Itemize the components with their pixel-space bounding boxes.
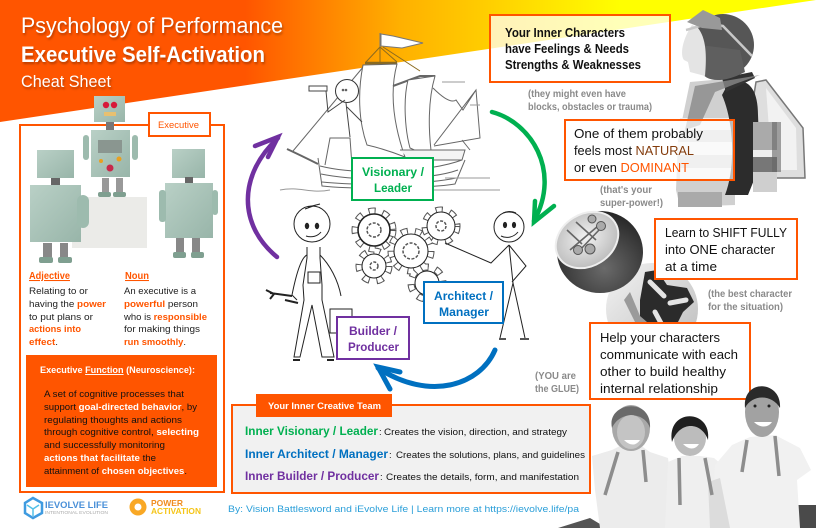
label: builder producer xyxy=(337,317,409,359)
text: adjective definition: actions into xyxy=(29,324,81,335)
text: noun definition: powerful person xyxy=(124,299,198,310)
label: visionary leader xyxy=(352,158,433,200)
callout: executive function: regulating thoughts and actions xyxy=(44,415,182,426)
callout: executive function: support goal-directed behavior, by xyxy=(44,402,197,413)
text: noun definition xyxy=(123,270,207,348)
text: noun definition: An executive is a xyxy=(124,286,197,297)
callout: shift fully xyxy=(655,219,797,279)
callout: help characters communicate: communicate with each xyxy=(600,347,738,362)
tab heading xyxy=(256,394,392,417)
callout: inner characters: Strengths & Weaknesses xyxy=(505,58,641,72)
callout: inner characters xyxy=(490,15,670,82)
note: super-power: (that's your xyxy=(600,185,652,196)
team list: Creates the vision, direction, and strategy xyxy=(384,427,567,438)
label: visionary leader: Leader xyxy=(374,183,413,195)
note: blocks xyxy=(528,89,652,113)
note: best character: (the best character xyxy=(708,289,792,300)
label: builder producer: Producer xyxy=(348,342,400,354)
illustration: robots xyxy=(30,96,218,263)
team list xyxy=(245,426,585,483)
text: noun definition: run smoothly. xyxy=(124,337,186,348)
team list: : xyxy=(379,427,382,438)
logo: iEvolve Life: IEVOLVE LIFE xyxy=(45,500,108,510)
team list: Creates the details, form, and manifestation xyxy=(386,472,579,483)
footer credit: By: Vision Battlesword and iEvolve Life | Learn more at https://ievolve.life/pa xyxy=(228,504,580,515)
callout: executive function xyxy=(26,355,217,487)
illustration: ship with lookout xyxy=(280,33,500,191)
callout: help characters communicate xyxy=(590,323,750,399)
label: visionary leader: Visionary / xyxy=(362,167,425,179)
arrow: green xyxy=(492,112,554,222)
illustration: architect figure xyxy=(445,212,529,339)
photo: boy with jetpack xyxy=(676,10,805,207)
label: architect manager: Architect / xyxy=(434,291,494,303)
tab heading: Your Inner Creative Team xyxy=(268,401,381,412)
note: you are the glue: the GLUE) xyxy=(535,384,579,395)
callout: help characters communicate: internal relationship xyxy=(600,381,718,396)
callout: shift fully: into ONE character xyxy=(665,242,776,257)
callout: inner characters: Your Inner Characters xyxy=(505,26,625,40)
callout: help characters communicate: other to build healthy xyxy=(600,364,727,379)
panel: inner creative team xyxy=(232,394,590,493)
note: blocks: blocks, obstacles or trauma) xyxy=(528,102,652,113)
note: super-power xyxy=(600,185,663,209)
text: adjective definition xyxy=(29,270,106,348)
banner background xyxy=(0,0,816,122)
team list: Inner Builder / Producer xyxy=(245,471,380,483)
label: builder producer: Builder / xyxy=(349,326,398,338)
callout: natural or dominant: feels most NATURAL xyxy=(574,143,694,158)
note: super-power: super-power!) xyxy=(600,198,663,209)
team list: Creates the solutions, plans, and guidelines xyxy=(396,450,585,461)
callout: natural or dominant: One of them probably xyxy=(574,126,704,141)
title block: Psychology of Performance xyxy=(21,13,283,38)
label: architect manager xyxy=(424,282,503,323)
callout: executive function: and successfully monitoring xyxy=(44,440,165,451)
note: best character xyxy=(708,289,792,313)
team list: Inner Architect / Manager xyxy=(245,449,389,461)
team list: : xyxy=(389,450,392,461)
illustration: builder figure xyxy=(266,204,352,360)
callout: help characters communicate: Help your characters xyxy=(600,330,720,345)
text: noun definition: Noun xyxy=(125,270,149,282)
callout: executive function: attainment of chosen objectives. xyxy=(44,466,187,477)
arrow: blue xyxy=(378,350,495,389)
callout: natural or dominant xyxy=(565,120,734,180)
label: architect manager: Manager xyxy=(439,307,490,319)
text: adjective definition: Adjective xyxy=(29,270,70,282)
photo: three chefs xyxy=(558,386,816,528)
text: adjective definition: to put plans or xyxy=(29,312,93,323)
panel: executive definition xyxy=(20,96,224,492)
logo: iEvolve Life xyxy=(25,498,108,518)
team list: : xyxy=(380,472,383,483)
team list: Inner Visionary / Leader xyxy=(245,426,379,438)
callout: executive function: actions that facilitate the xyxy=(44,453,156,464)
callout: executive function: A set of cognitive processes that xyxy=(44,389,184,400)
callout: inner characters: have Feelings & Needs xyxy=(505,42,629,56)
note: you are the glue xyxy=(535,371,579,395)
illustration: gears xyxy=(355,210,457,299)
text: adjective definition: effect. xyxy=(29,337,58,348)
logo: Power Activation xyxy=(130,498,201,516)
label: Executive: Executive xyxy=(158,120,199,130)
logo: Power Activation: ACTIVATION xyxy=(151,506,201,516)
note: blocks: (they might even have xyxy=(528,89,626,100)
callout: executive function: Executive Function (Neuroscience): xyxy=(40,365,195,376)
title block: Executive Self-Activation xyxy=(21,42,265,67)
note: best character: for the situation) xyxy=(708,302,783,313)
logo: iEvolve Life: INTENTIONAL EVOLUTION xyxy=(45,510,108,515)
callout: natural or dominant: or even DOMINANT xyxy=(574,160,689,175)
note: you are the glue: (YOU are xyxy=(535,371,576,382)
label: Executive xyxy=(149,113,210,136)
text: noun definition: who is responsible xyxy=(123,312,207,323)
title block: Cheat Sheet xyxy=(21,72,111,91)
callout: shift fully: at a time xyxy=(665,259,717,274)
text: adjective definition: Relating to or xyxy=(29,286,88,297)
text: noun definition: for making things xyxy=(124,324,200,335)
arrow: purple xyxy=(248,137,278,257)
callout: shift fully: Learn to SHIFT FULLY xyxy=(665,225,787,240)
text: adjective definition: having the power xyxy=(29,299,106,310)
callout: executive function: through cognitive control, selecting xyxy=(44,427,199,438)
title block xyxy=(21,13,283,91)
logo: Power Activation: POWER xyxy=(151,498,183,508)
photo: gear shift knob xyxy=(545,200,698,355)
